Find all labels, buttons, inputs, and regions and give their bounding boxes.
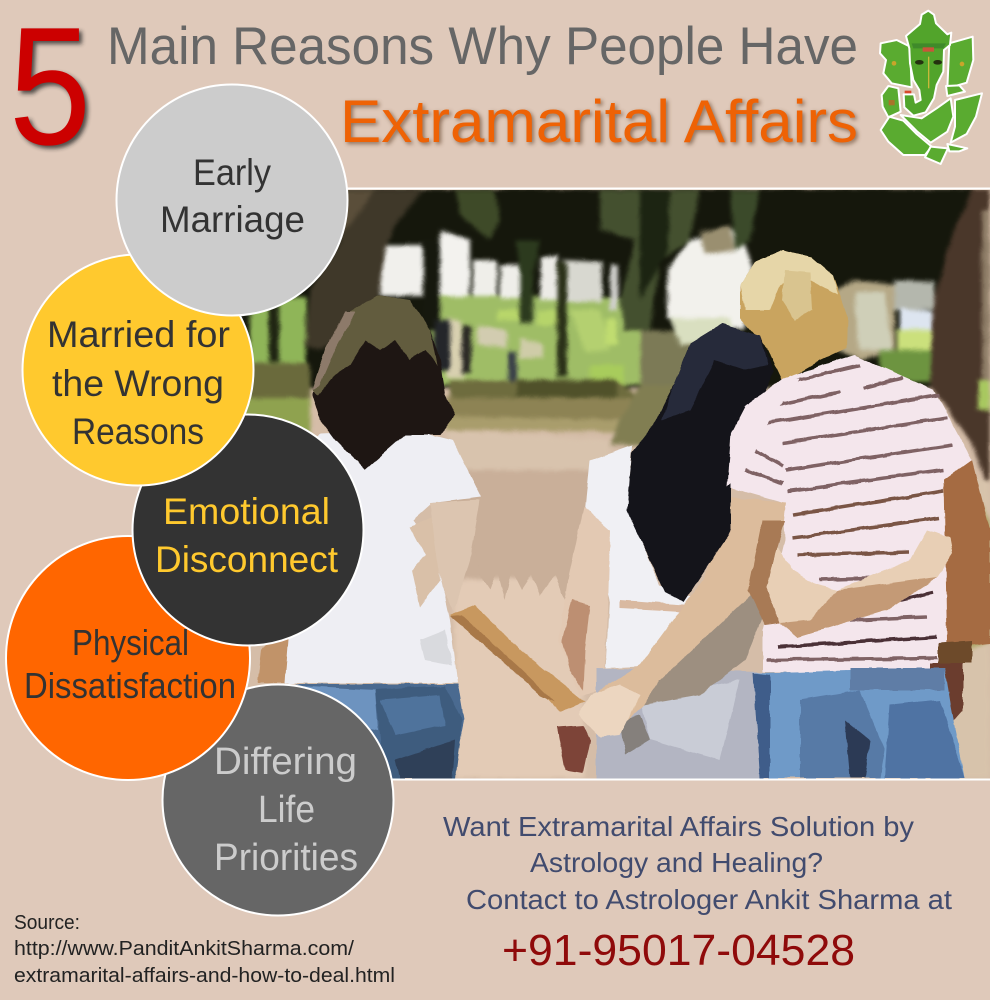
icon: green Ganesha	[880, 11, 982, 164]
ear dot right	[960, 62, 964, 66]
circle: physical dissatisfaction: Dissatisfaction	[24, 665, 236, 706]
trunk tip	[905, 91, 911, 93]
circle: differing life priorities: Life	[258, 789, 315, 831]
ear right	[947, 37, 973, 88]
source citation: Source:	[14, 912, 80, 934]
head and trunk	[904, 11, 951, 116]
man's shoulder over hair	[727, 378, 800, 487]
circle: differing life priorities: Differing	[214, 741, 357, 783]
source citation	[14, 912, 395, 987]
circle: differing life priorities: Priorities	[214, 837, 358, 879]
small hand right	[946, 85, 965, 96]
ragged shadow edge on the path	[482, 574, 570, 600]
leg	[881, 117, 932, 155]
call to action text: Want Extramarital Affairs Solution by	[443, 811, 914, 842]
source citation: http://www.PanditAnkitSharma.com/	[14, 938, 354, 960]
ear dot left	[892, 61, 896, 66]
circle: emotional disconnect: Disconnect	[155, 539, 339, 580]
small foot	[947, 144, 967, 151]
hand mark	[889, 100, 895, 105]
photo white frame	[240, 188, 990, 780]
circle: emotional disconnect: Emotional	[163, 491, 330, 532]
title line 2: Extramarital Affairs	[340, 88, 858, 155]
foot	[925, 147, 948, 164]
circle: married for the wrong reasons	[22, 254, 254, 486]
eye right	[933, 60, 942, 65]
phone number: +91-95017-04528	[502, 926, 855, 975]
eye left	[915, 60, 924, 65]
circle: early marriage: Marriage	[160, 199, 305, 240]
circle: differing life priorities	[162, 684, 394, 916]
ear left	[880, 40, 912, 87]
man's hair	[740, 250, 848, 382]
photo: couple and other woman walking in a park	[240, 188, 990, 780]
circle: emotional disconnect	[132, 414, 364, 646]
forehead mark	[923, 47, 934, 52]
title line 1: Main Reasons Why People Have	[107, 17, 858, 76]
circle: married for the wrong reasons: the Wrong	[52, 363, 224, 404]
crown band	[912, 43, 946, 48]
man's shirt and arms	[578, 355, 990, 778]
title line 2: Extramarital Affairs	[342, 90, 860, 157]
source citation: extramarital-affairs-and-how-to-deal.html	[14, 965, 395, 987]
call to action text: Contact to Astrologer Ankit Sharma at	[466, 884, 952, 915]
circle: married for the wrong reasons: Married for	[47, 314, 230, 355]
belly	[901, 98, 953, 143]
middle woman's dark hair	[627, 324, 774, 602]
circle: married for the wrong reasons: Reasons	[72, 411, 204, 452]
circle: early marriage	[116, 84, 348, 316]
trunk line	[928, 57, 929, 88]
big number 5: 5	[12, 0, 94, 183]
circle: physical dissatisfaction	[6, 536, 250, 780]
circle: physical dissatisfaction: Physical	[72, 622, 189, 663]
circle: early marriage: Early	[193, 152, 271, 193]
call to action text	[443, 811, 952, 915]
hand left	[882, 86, 901, 117]
call to action text: Astrology and Healing?	[530, 847, 823, 878]
photo background: park trees and path	[240, 188, 990, 778]
middle woman	[558, 445, 765, 779]
left woman	[258, 295, 590, 779]
leaf right	[951, 93, 982, 143]
